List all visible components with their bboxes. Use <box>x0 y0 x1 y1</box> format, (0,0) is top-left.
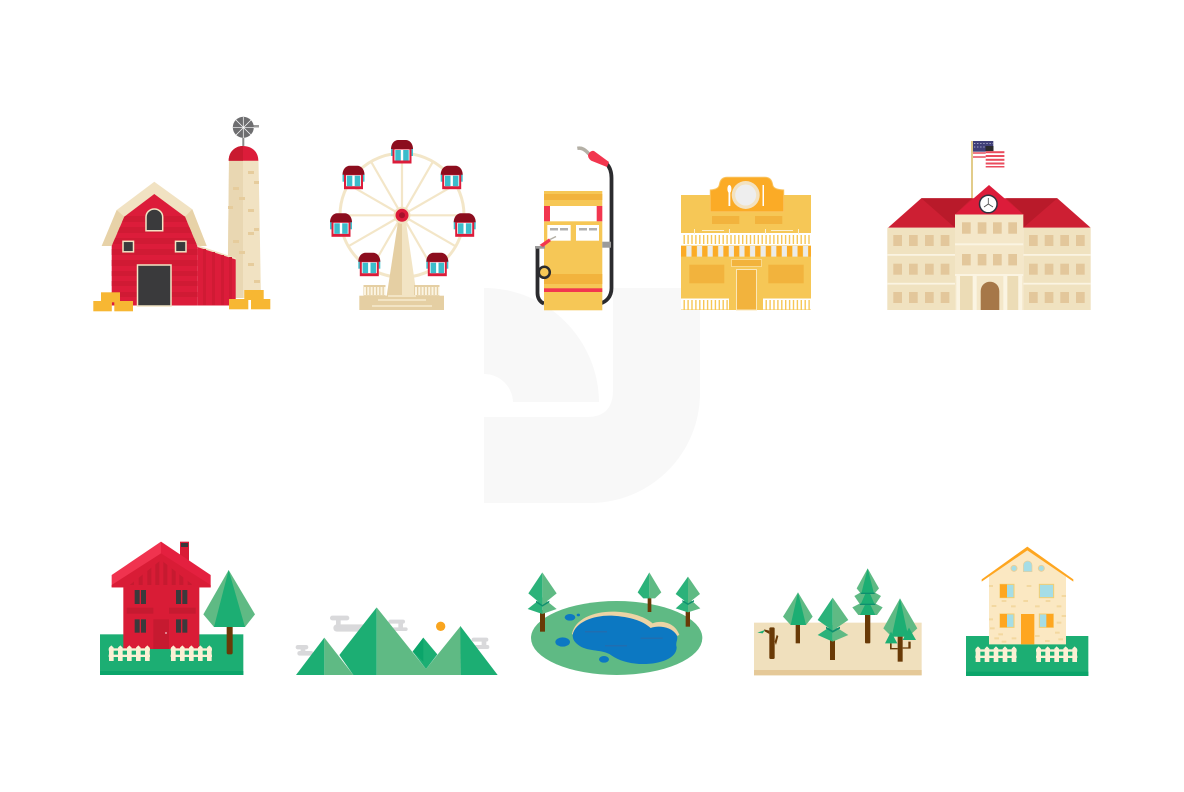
nozzle top <box>577 148 609 167</box>
windows <box>689 265 804 283</box>
pond sand bank <box>572 612 679 647</box>
roof <box>888 198 1091 228</box>
hay bales <box>93 290 270 311</box>
right peak <box>460 626 498 675</box>
picket fences <box>975 646 1077 662</box>
roof <box>982 547 1073 582</box>
tree <box>203 570 255 654</box>
tree middle <box>638 572 661 612</box>
flags <box>973 141 1004 168</box>
house walls <box>123 552 199 649</box>
upper panels <box>712 216 782 224</box>
tree right <box>676 577 700 627</box>
flag pole <box>971 141 973 199</box>
side wings <box>887 228 1091 310</box>
windows <box>893 222 1085 303</box>
house windows <box>135 590 187 633</box>
nozzle holder <box>535 236 556 249</box>
hub <box>394 207 410 224</box>
icon: cream house <box>966 547 1088 676</box>
lower windows <box>1000 614 1053 627</box>
icon: red barn with silo <box>93 117 270 311</box>
barn body <box>110 194 236 306</box>
icon: pond with trees <box>528 572 702 675</box>
background watermark logo <box>484 288 700 503</box>
central block <box>955 214 1023 310</box>
pond water <box>573 616 677 664</box>
picket fences <box>109 645 212 661</box>
chimney <box>180 542 189 565</box>
lawn <box>100 634 243 675</box>
tree D <box>883 598 917 662</box>
icon: mountains with sun <box>296 607 498 675</box>
icon: school with flag <box>887 141 1091 310</box>
house roof <box>112 542 211 587</box>
tower <box>386 222 417 297</box>
icon: forest clearing <box>754 568 922 675</box>
sun <box>436 622 445 631</box>
barn roof <box>102 182 236 260</box>
hose ring <box>539 267 550 278</box>
striped awning <box>681 246 811 257</box>
tree A <box>783 592 813 643</box>
attic windows <box>1011 561 1044 572</box>
plate sign <box>710 177 784 212</box>
tree left <box>528 572 557 632</box>
small pools <box>555 614 609 663</box>
pediment <box>955 185 1023 214</box>
wheel rim and spokes <box>340 153 464 277</box>
icon: red house with tree <box>100 542 255 675</box>
silo <box>228 146 261 298</box>
tree C <box>852 568 883 643</box>
ripples <box>585 631 663 646</box>
left peak <box>296 638 353 675</box>
base and railings <box>359 285 444 310</box>
door <box>736 270 756 310</box>
lawn <box>966 636 1088 676</box>
hose clip <box>602 242 611 248</box>
tree B <box>818 598 848 660</box>
icon: restaurant <box>681 177 811 310</box>
shop sign <box>732 260 762 266</box>
hoses <box>538 163 612 304</box>
windmill <box>233 117 259 146</box>
meadow <box>531 601 702 675</box>
clouds <box>296 616 489 656</box>
large centre peak <box>339 607 461 675</box>
building wall <box>681 195 811 310</box>
dead stump <box>757 627 778 659</box>
gondolas <box>330 140 476 276</box>
lower railings <box>681 298 811 304</box>
icon: fuel pump <box>535 148 612 310</box>
balcony railing <box>681 229 811 246</box>
pump body <box>544 191 602 310</box>
walls <box>989 549 1066 644</box>
entrance door <box>981 282 999 310</box>
clock <box>980 195 997 213</box>
icon: ferris wheel <box>330 140 476 310</box>
door <box>1021 614 1034 644</box>
upper windows <box>1000 584 1054 598</box>
sand ground <box>754 623 922 675</box>
small back peak <box>413 638 437 669</box>
